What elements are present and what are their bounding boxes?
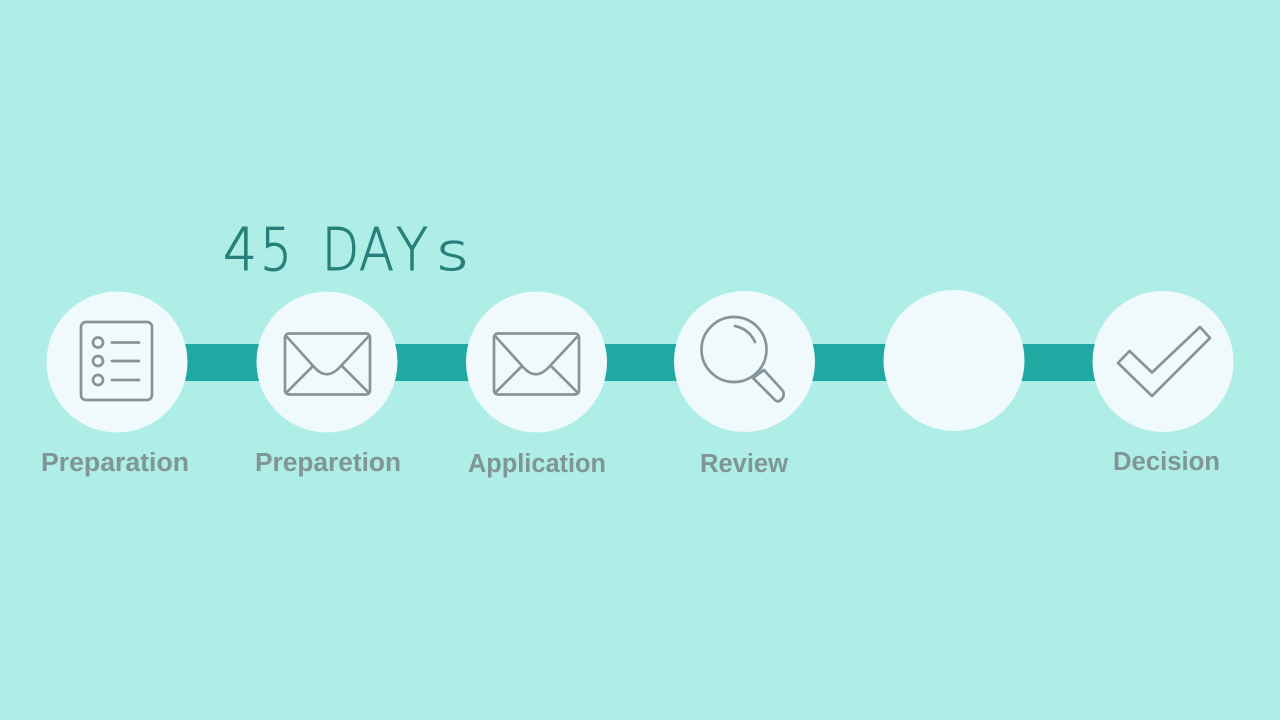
label: Preparation [41,449,189,477]
icon: checklist [81,322,152,400]
circle 3 [466,292,607,432]
title: 45 DAYs: 4 [223,215,257,284]
circle 6 [1092,291,1234,432]
label: Application [468,450,606,478]
step 5: empty circle [884,290,1024,431]
title: 45 DAYs: A [359,215,394,284]
circle 2 [256,292,398,432]
icon: check mark [1118,327,1210,396]
circle 4 [674,291,815,432]
timeline bar [180,344,1100,381]
step 6: Decision [1092,291,1234,476]
label: Decision [1113,448,1220,476]
title: 45 DAYs: D [322,215,359,284]
title: 45 DAYs: 5 [260,215,292,284]
icon: magnifier [702,317,784,401]
title: 45 DAYs: Y [396,215,428,284]
title: 45 DAYs [223,215,469,284]
label: Review [700,450,788,478]
circle 1 [46,292,188,432]
step 3: Application [466,292,607,478]
label: Preparetion [255,449,401,477]
icon: envelope [285,334,370,394]
icon: envelope [494,334,579,394]
title: 45 DAYs: s [436,223,469,283]
step 4: Review [674,291,815,478]
step 2: Preparetion [255,292,401,477]
step 1: Preparation [41,292,189,477]
